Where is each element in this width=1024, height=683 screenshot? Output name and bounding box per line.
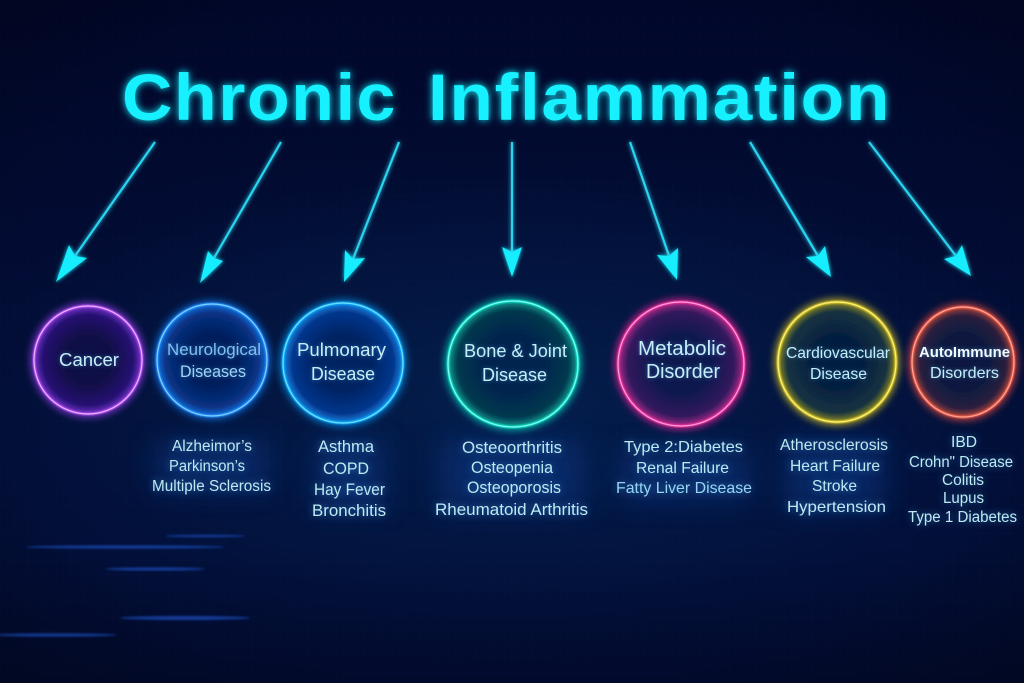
label: neurological diseases: Diseases bbox=[180, 363, 246, 381]
arrow: to metabolic disorder bbox=[630, 142, 678, 280]
circle: neurological diseases bbox=[157, 304, 267, 416]
label: bone and joint disease: Disease bbox=[482, 365, 547, 385]
circle: bone and joint disease bbox=[448, 301, 578, 427]
list: metabolic conditions bbox=[616, 439, 752, 497]
list: autoimmune conditions: IBD bbox=[951, 434, 977, 451]
list: bone and joint conditions bbox=[435, 439, 588, 519]
arrow: to bone and joint disease bbox=[502, 142, 522, 277]
panel: metabolic disorder bbox=[616, 302, 752, 497]
list: cardiovascular conditions: Heart Failure bbox=[790, 458, 880, 475]
label: metabolic disorder bbox=[638, 337, 726, 383]
arrow: to cancer bbox=[56, 142, 155, 282]
label: pulmonary disease: Pulmonary bbox=[297, 339, 387, 360]
list: neurological conditions bbox=[152, 438, 271, 495]
list: neurological conditions: Parkinson’s bbox=[169, 458, 245, 475]
list: metabolic conditions: Renal Failure bbox=[636, 460, 729, 477]
arrow: to cardiovascular disease bbox=[750, 142, 831, 277]
list: pulmonary conditions bbox=[312, 438, 386, 520]
list: cardiovascular conditions bbox=[780, 437, 888, 516]
label: cardiovascular disease: Cardiovascular bbox=[786, 345, 890, 362]
list: bone and joint conditions: Osteopenia bbox=[471, 459, 554, 477]
circle: pulmonary disease bbox=[283, 303, 403, 423]
list: cardiovascular conditions: Stroke bbox=[812, 478, 857, 495]
list: autoimmune conditions: Lupus bbox=[943, 490, 984, 507]
panel: pulmonary disease bbox=[283, 303, 403, 520]
circle: autoimmune disorders bbox=[912, 307, 1014, 417]
circle: metabolic disorder bbox=[618, 302, 744, 426]
circle: cardiovascular disease bbox=[778, 302, 896, 422]
label: pulmonary disease bbox=[297, 339, 387, 384]
label: cardiovascular disease bbox=[786, 345, 890, 383]
label: autoimmune disorders: Disorders bbox=[930, 365, 999, 382]
label: autoimmune disorders bbox=[919, 344, 1010, 382]
title: Inflammation bbox=[428, 60, 891, 134]
label: autoimmune disorders: AutoImmune bbox=[919, 344, 1010, 361]
list: metabolic conditions: Fatty Liver Disease bbox=[616, 480, 752, 497]
circle: cancer bbox=[34, 306, 142, 414]
list: pulmonary conditions: COPD bbox=[323, 460, 369, 478]
list: autoimmune conditions: Crohn" Disease bbox=[909, 454, 1013, 471]
panel: autoimmune disorders bbox=[908, 307, 1017, 526]
panel: bone and joint disease bbox=[435, 301, 588, 519]
list: neurological conditions: Multiple Sclerosis bbox=[152, 478, 271, 495]
list: cardiovascular conditions: Hypertension bbox=[787, 499, 886, 516]
list: autoimmune conditions: Type 1 Diabetes bbox=[908, 509, 1017, 526]
list: autoimmune conditions bbox=[908, 434, 1017, 526]
arrows bbox=[56, 142, 971, 283]
list: bone and joint conditions: Osteoporosis bbox=[467, 479, 561, 497]
label: cancer: Cancer bbox=[59, 349, 119, 370]
list: autoimmune conditions: Colitis bbox=[942, 472, 984, 489]
label: neurological diseases: Neurological bbox=[167, 340, 261, 359]
list: cardiovascular conditions: Atherosclerosis bbox=[780, 437, 888, 454]
arrow: to autoimmune disorders bbox=[869, 142, 971, 276]
title bbox=[122, 60, 891, 134]
label: neurological diseases bbox=[167, 340, 261, 381]
list: pulmonary conditions: Hay Fever bbox=[314, 481, 385, 499]
label: cardiovascular disease: Disease bbox=[810, 366, 867, 383]
list: bone and joint conditions: Rheumatoid Arthritis bbox=[435, 501, 588, 519]
title: Chronic bbox=[122, 60, 397, 134]
label: bone and joint disease: Bone & Joint bbox=[464, 341, 567, 361]
list: pulmonary conditions: Asthma bbox=[318, 438, 375, 456]
panel: cardiovascular disease bbox=[778, 302, 896, 516]
list: pulmonary conditions: Bronchitis bbox=[312, 502, 386, 520]
panel: cancer bbox=[34, 306, 142, 414]
list: bone and joint conditions: Osteoorthritis bbox=[462, 439, 562, 457]
list: metabolic conditions: Type 2:Diabetes bbox=[624, 439, 743, 456]
arrow: to pulmonary disease bbox=[344, 142, 399, 282]
label: metabolic disorder: Metabolic bbox=[638, 337, 726, 360]
panel: neurological diseases bbox=[152, 304, 271, 495]
label: pulmonary disease: Disease bbox=[311, 364, 375, 384]
label: metabolic disorder: Disorder bbox=[646, 361, 720, 383]
arrow: to neurological diseases bbox=[200, 142, 281, 283]
label: bone and joint disease bbox=[464, 341, 567, 385]
list: neurological conditions: Alzheimor’s bbox=[172, 438, 252, 455]
